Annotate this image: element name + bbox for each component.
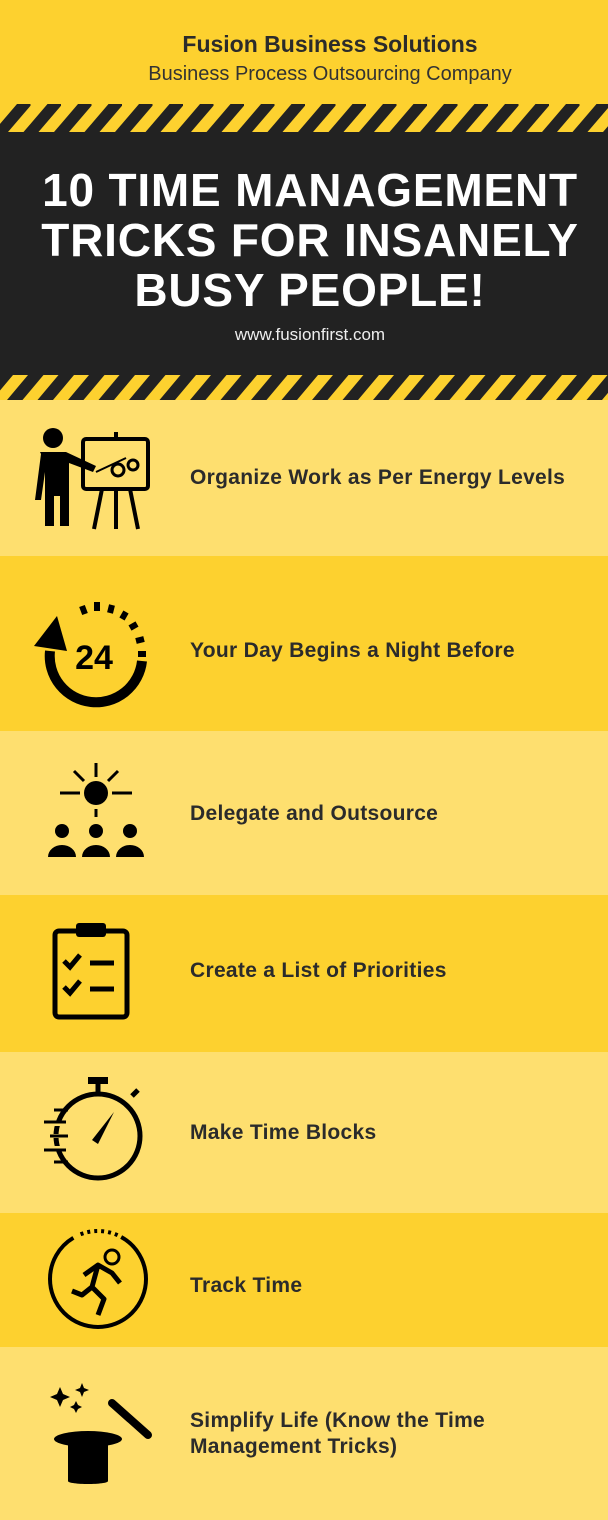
row 3: [0, 731, 608, 895]
row 7: [0, 1347, 608, 1520]
label: Management Tricks): [190, 1435, 397, 1458]
icon: 24 hours: 24: [75, 639, 113, 677]
label: Organize Work as Per Energy Levels: [190, 466, 565, 489]
main title: BUSY PEOPLE!: [134, 264, 486, 316]
company name: Fusion Business Solutions: [182, 31, 478, 57]
label: Make Time Blocks: [190, 1121, 376, 1144]
row 2: [0, 556, 608, 731]
website: www.fusionfirst.com: [235, 325, 385, 344]
row 4: [0, 895, 608, 1052]
label: Create a List of Priorities: [190, 959, 447, 982]
icon: delegate: [48, 763, 144, 857]
label: Delegate and Outsource: [190, 802, 438, 825]
icon: 24 hours: [34, 602, 147, 708]
label: Track Time: [190, 1274, 302, 1297]
main title: [41, 164, 579, 316]
icon: presenter: [35, 428, 150, 530]
row 5: [0, 1052, 608, 1213]
label: [190, 1409, 485, 1458]
subtitle: Business Process Outsourcing Company: [148, 63, 512, 85]
label: Simplify Life (Know the Time: [190, 1409, 485, 1432]
main title: 10 TIME MANAGEMENT: [42, 164, 578, 216]
row 1: [0, 400, 608, 556]
row 6: [0, 1213, 608, 1347]
header: [0, 0, 608, 104]
icon: magic hat: [50, 1383, 152, 1484]
main title: TRICKS FOR INSANELY: [41, 214, 579, 266]
title band: [0, 104, 608, 400]
label: Your Day Begins a Night Before: [190, 639, 515, 662]
icon: stopwatch: [44, 1077, 142, 1180]
icon: checklist: [52, 923, 130, 1020]
icon: runner: [48, 1229, 148, 1329]
